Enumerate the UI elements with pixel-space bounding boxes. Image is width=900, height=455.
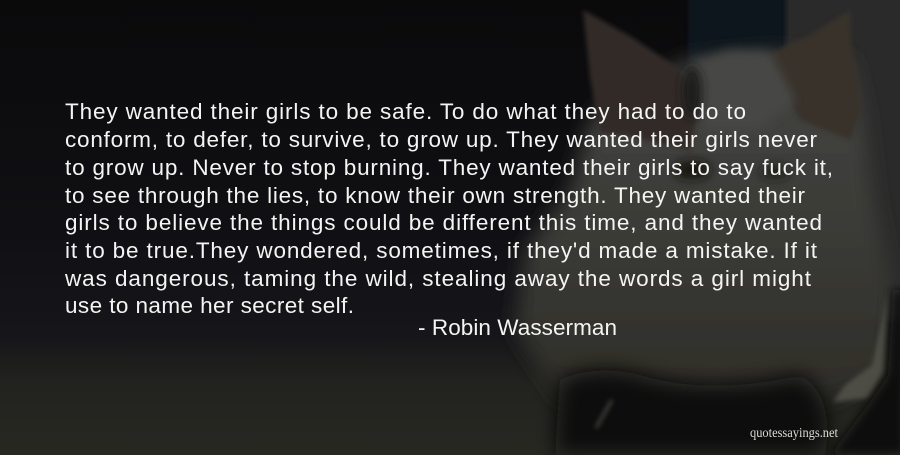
quote text: it to be true.They wondered, sometimes, if they'd made a mistake. If it (65, 238, 818, 263)
quote text (64, 99, 833, 318)
quote text: girls to believe the things could be different this time, and they wanted (65, 210, 822, 235)
quote text: They wanted their girls to be safe. To do what they had to do to (65, 99, 746, 124)
quote text: to see through the lies, to know their own strength. They wanted their (65, 183, 806, 208)
attribution: - Robin Wasserman (418, 315, 617, 340)
quote text: conform, to defer, to survive, to grow up. They wanted their girls never (65, 127, 818, 152)
quote text: to grow up. Never to stop burning. They wanted their girls to say fuck it, (65, 155, 833, 180)
quote text: use to name her secret self. (65, 293, 354, 318)
watermark: quotessayings.net (750, 425, 838, 440)
quote text: was dangerous, taming the wild, stealing away the words a girl might (64, 266, 812, 291)
